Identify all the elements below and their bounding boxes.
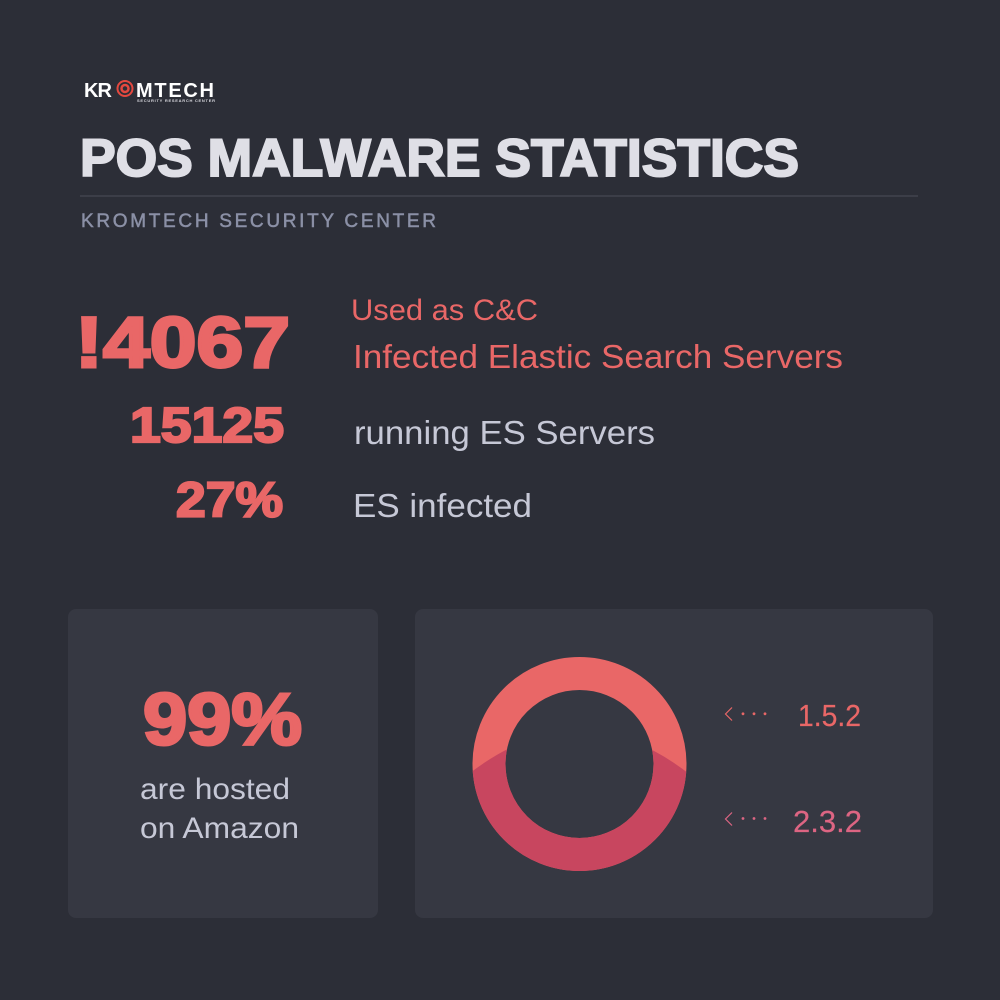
stat: 27% infected: ES infected [353,487,532,524]
stat: 27% infected [176,474,532,528]
logo: Kromtech: MTECH [136,80,214,102]
stat: 4067 infected servers: Used as C&C [351,294,538,327]
legend: 2.3.2 [726,804,862,839]
legend: 1.5.2 [726,698,861,733]
panel: version donut chart [415,609,933,918]
caption: are hosted on Amazon [140,773,299,845]
subtitle: KROMTECH SECURITY CENTER [81,211,436,232]
title: POS MALWARE STATISTICS [80,129,799,188]
donut chart [489,674,670,854]
stat: 15125 running servers: 15125 [130,399,284,453]
logo: Kromtech: KR [84,80,113,102]
logo: Kromtech [84,80,215,103]
legend: 1.5.2: 1.5.2 [798,698,861,733]
stat: 4067 infected servers [75,294,843,383]
big number: 99%: 99% [143,680,302,760]
caption: are hosted on Amazon: are hosted [140,773,290,806]
arrow [726,708,766,720]
panel: hosted on Amazon [68,609,378,918]
arrow [726,812,766,826]
logo: Kromtech: SECURITY RESEARCH CENTER [137,98,215,103]
stat: 4067 infected servers: Infected Elastic Search Servers [353,338,843,375]
stat: 4067 infected servers: !4067 [75,304,290,383]
legend: 2.3.2: 2.3.2 [793,804,862,839]
icon: logo target [118,81,132,96]
caption: are hosted on Amazon: on Amazon [140,812,299,845]
infographic canvas [68,80,933,918]
stat: 15125 running servers: running ES Servers [354,414,655,451]
stat: 27% infected: 27% [176,474,283,528]
stat: 15125 running servers [130,399,655,453]
